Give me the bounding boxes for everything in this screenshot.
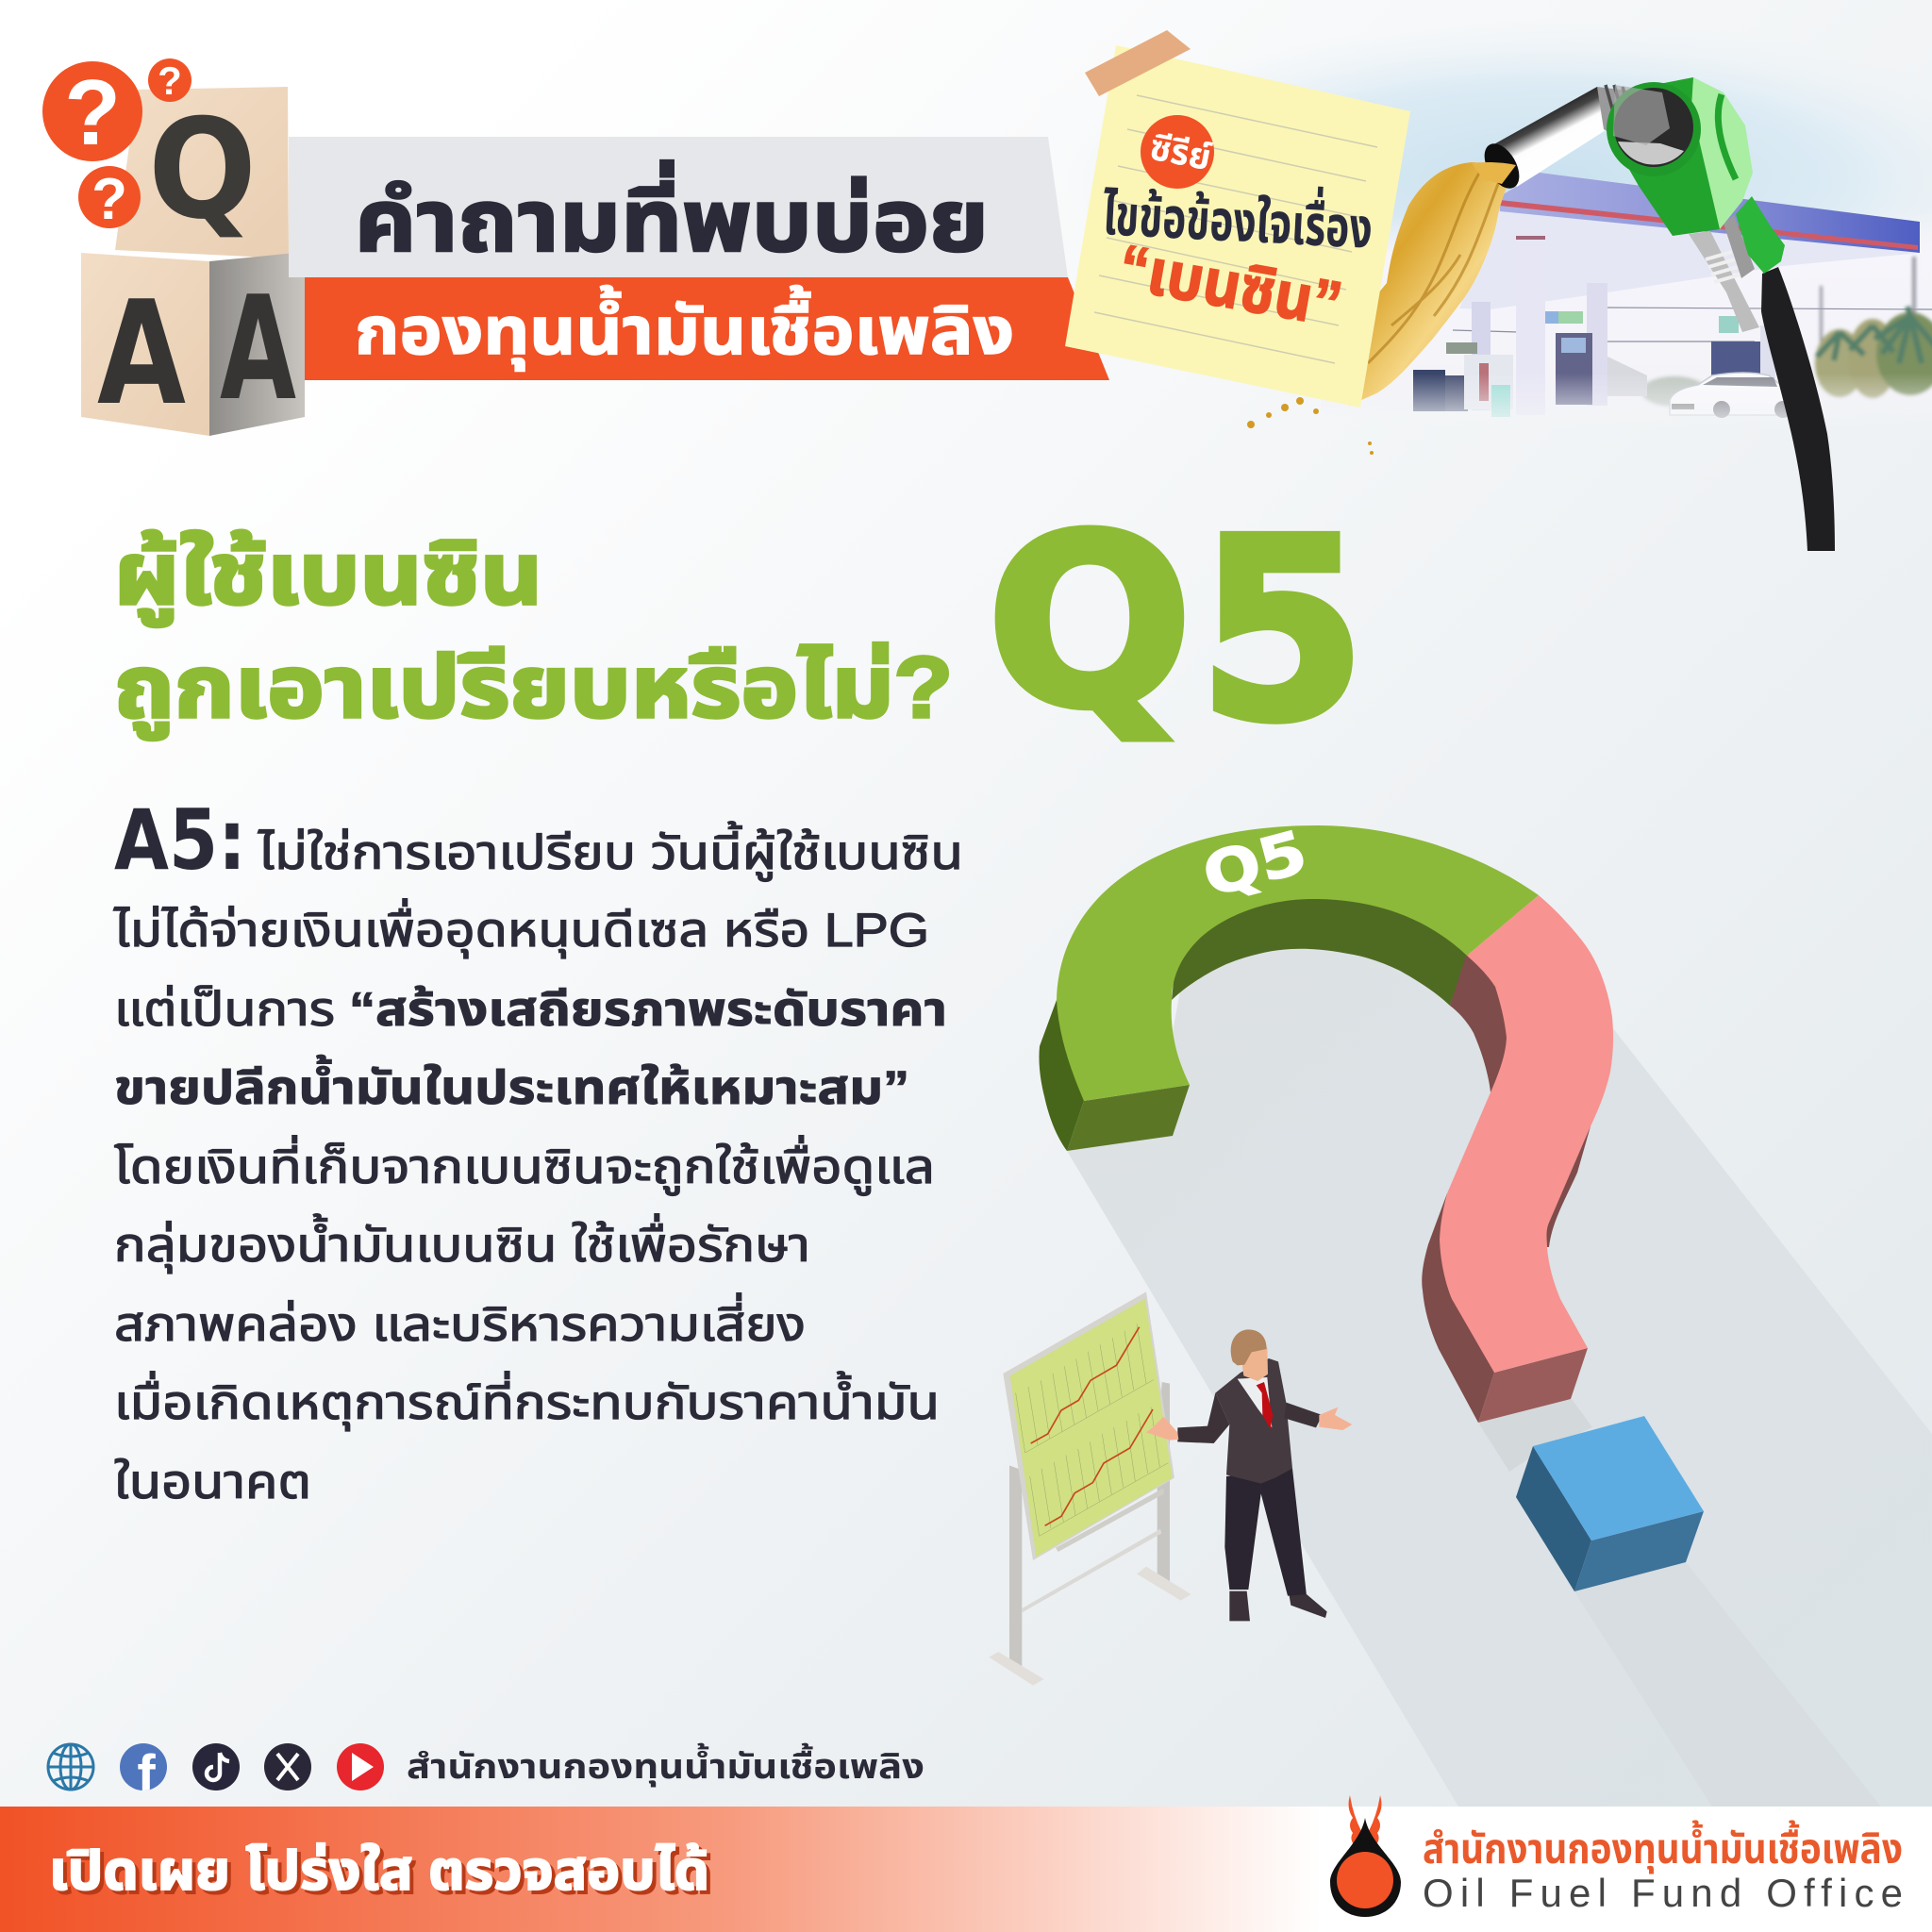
footer slogan: เปิดเผย โปร่งใส ตรวจสอบได้: [53, 1844, 713, 1906]
heading: Q5: 5: [1198, 486, 1366, 776]
line 9: ในอนาคต: [114, 1456, 311, 1508]
illustration: 3D question mark: [1039, 817, 1613, 1423]
title: คำถามที่พบบ่อย: [355, 160, 989, 270]
illustration: blue cube: [1516, 1416, 1704, 1591]
heading: Q5: [987, 485, 1366, 776]
Q5 label: Q5: [1196, 817, 1314, 910]
heading: question line 1: ผู้ใช้เบนซิน: [114, 526, 542, 627]
footer slogan: เปิดเผย โปร่งใส ตรวจสอบได้: [49, 1840, 709, 1902]
line 8: เมื่อเกิดเหตุการณ์ที่กระทบกับราคาน้ำมัน: [114, 1371, 940, 1431]
canopy underside: [1459, 211, 1920, 309]
icon: Q and A wooden blocks: Q: [148, 90, 257, 250]
banner: orange subtitle band: [305, 277, 1109, 380]
line 1: ไม่ใช่การเอาเปรียบ วันนี้ผู้ใช้เบนซิน: [258, 821, 963, 881]
sticky note: [1065, 30, 1410, 408]
line 3 bold: “สร้างเสถียรภาพระดับราคา: [349, 983, 947, 1036]
subtitle: กองทุนน้ำมันเชื้อเพลิง: [355, 285, 1014, 371]
line 7: สภาพคล่อง และบริหารความเสี่ยง: [114, 1292, 806, 1351]
badge: series: ซีรีย์: [1146, 128, 1214, 178]
canopy roof: [1500, 173, 1920, 253]
answer label: A5:: [114, 791, 246, 889]
heading: question line 2: ถูกเอาเปรียบหรือไม่?: [114, 640, 953, 741]
illustration: fuel nozzle: [1472, 77, 1785, 332]
palm trees: [1815, 257, 1932, 398]
distant trees and house: [1641, 376, 1707, 407]
badge: series: [1141, 115, 1214, 189]
illustration: fuel hose: [1761, 267, 1835, 551]
note keyword: “เบนซิน”: [1113, 231, 1347, 341]
canopy columns: [1516, 302, 1545, 394]
line 2: ไม่ได้จ่ายเงินเพื่ออุดหนุนดีเซล หรือ LPG: [113, 898, 929, 958]
icon: Q and A wooden blocks: [81, 87, 305, 437]
line 3: แต่เป็นการ: [114, 983, 335, 1036]
social icon: website: [48, 1744, 93, 1790]
icon: orange question bubbles: [42, 58, 192, 232]
forecourt signs and pumps: [1558, 311, 1583, 324]
photo: petrol station backdrop: [1282, 51, 1932, 418]
icon: orange question bubbles: ?: [158, 58, 182, 103]
long shadow of question mark: [1067, 943, 1932, 1807]
social handle: สำนักงานกองทุนน้ำมันเชื้อเพลิง: [407, 1742, 924, 1787]
line 6: กลุ่มของน้ำมันเบนซิน ใช้เพื่อรักษา: [114, 1213, 810, 1274]
answer text: [113, 791, 963, 1508]
icon: Q and A wooden blocks: A: [97, 270, 186, 437]
icon: orange question bubbles: ?: [64, 60, 121, 164]
logo: English name: Oil Fuel Fund Office: [1423, 1871, 1903, 1915]
illustration: oil stream: [1247, 162, 1516, 455]
icon: Q and A wooden blocks: A: [220, 265, 296, 432]
icon: orange question bubbles: ?: [92, 167, 127, 232]
social icon: X: [264, 1743, 311, 1790]
social icon: facebook: [120, 1743, 167, 1790]
illustration: businessman: [1146, 1329, 1352, 1621]
line 5: โดยเงินที่เก็บจากเบนซินจะถูกใช้เพื่อดูแล: [114, 1135, 935, 1195]
line 4: ขายปลีกน้ำมันในประเทศให้เหมาะสม”: [114, 1055, 909, 1114]
footer band: [0, 1807, 1932, 1932]
social icon: facebook: f: [137, 1744, 156, 1806]
banner: grey title band: [289, 137, 1068, 277]
social icon: tiktok: [192, 1743, 240, 1790]
logo: oil drop: [1330, 1795, 1401, 1917]
social icon: youtube: [337, 1743, 384, 1790]
heading: Q5: Q: [987, 485, 1192, 759]
note heading: ไขข้อข้องใจเรื่อง: [1101, 175, 1374, 260]
white car: [1670, 373, 1791, 418]
illustration: presentation board: [989, 1291, 1191, 1686]
tape: [1085, 30, 1191, 96]
